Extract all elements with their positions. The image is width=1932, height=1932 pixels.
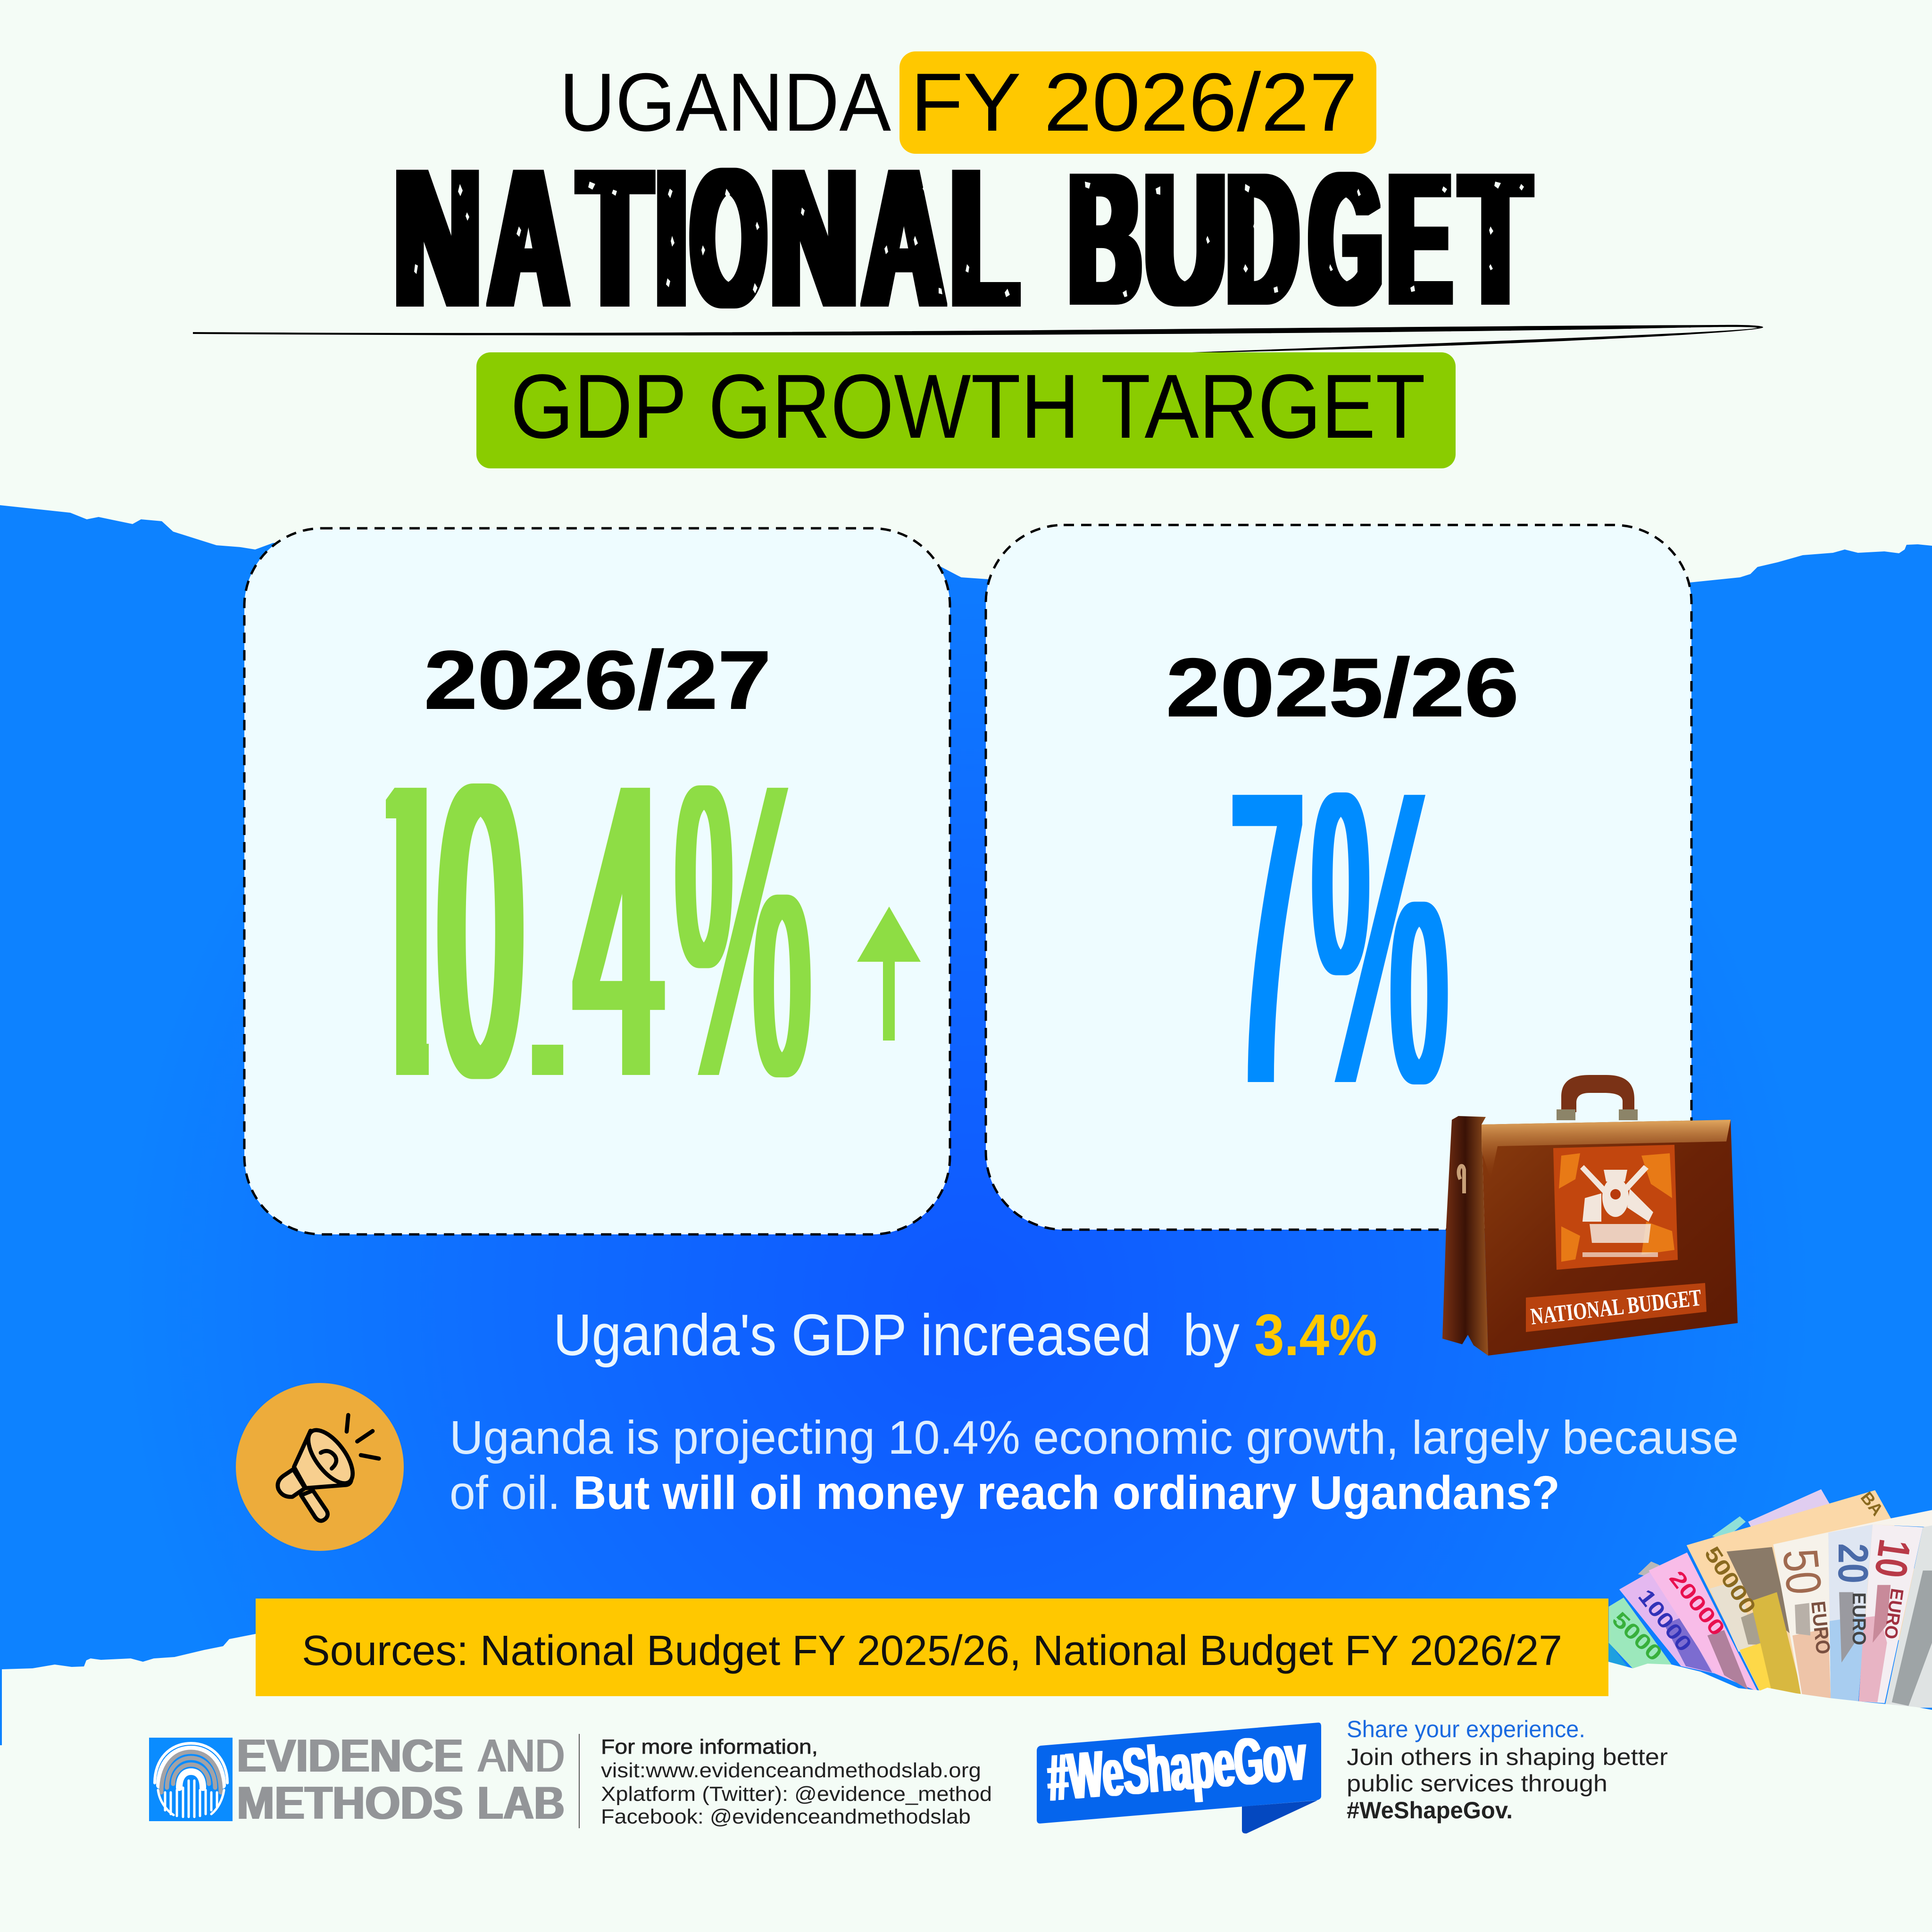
call to action text: public services through: [1347, 1770, 1607, 1797]
icon: up arrow: [857, 907, 921, 1041]
heading: National Budget: T: [1461, 135, 1530, 343]
illustration: fan of banknotes: 20000: [1665, 1566, 1730, 1640]
banner body: [1037, 1723, 1321, 1824]
fingerprint mark: [155, 1743, 227, 1817]
wordmark: EVIDENCE: [237, 1730, 463, 1782]
heading: National Budget: U: [1145, 135, 1225, 343]
growth value 10.4%: .: [524, 819, 571, 1135]
takeaway paragraph: of oil.: [450, 1466, 560, 1519]
coat of arms: [1580, 1165, 1658, 1257]
heading: National Budget: A: [490, 129, 567, 347]
wordmark: LAB: [477, 1777, 565, 1829]
growth value 10.4%: 0: [439, 697, 522, 1164]
panel: 2025/26: [986, 525, 1691, 1230]
growth value 10.4%: [386, 783, 811, 1079]
emblem plate: [1553, 1145, 1678, 1270]
hashtag banner: #WeShapeGov: [1037, 1719, 1321, 1833]
heading: National Budget: L: [951, 129, 1018, 347]
contact information: Xplatform (Twitter): @evidence_method: [601, 1782, 992, 1806]
sources bar: [256, 1599, 1608, 1696]
title line: Uganda FY 2026/27: [559, 51, 1376, 154]
side gusset: [1442, 1116, 1488, 1356]
blue torn-paper band: [0, 505, 1932, 1745]
subtitle pill: GDP growth target: GDP GROWTH TARGET: [510, 355, 1425, 457]
contact information: Facebook: @evidenceandmethodslab: [601, 1805, 971, 1828]
call to action text: [1347, 1716, 1668, 1824]
contact information: For more information,: [601, 1735, 818, 1758]
call to action text: Share your experience.: [1347, 1716, 1585, 1742]
illustration: fan of banknotes: EURO: [1849, 1592, 1869, 1645]
bold question: But will oil money reach ordinary Ugandans?: [573, 1466, 1560, 1519]
growth value 10.4%: 1: [348, 698, 464, 1164]
panel: 2026/27: [244, 528, 950, 1234]
highlighted figure: 3.4%: [1254, 1303, 1377, 1368]
heading: National Budget: [394, 129, 1530, 347]
note denominations: 5000: [1607, 1607, 1667, 1666]
logo: Evidence and Methods Lab: [149, 1730, 565, 1829]
heading: National Budget: N: [770, 129, 858, 347]
label plate: [1526, 1283, 1707, 1332]
growth value 10.4%: %: [675, 698, 811, 1164]
illustration: national budget briefcase: [1442, 1075, 1738, 1356]
illustration: fan of banknotes: 50: [1772, 1546, 1832, 1597]
comparison statement: by: [1183, 1303, 1240, 1368]
handle: [1561, 1075, 1634, 1112]
icon: megaphone: [236, 1383, 404, 1551]
illustration: fan of banknotes: 10000: [1633, 1584, 1697, 1656]
handle clips: [1557, 1109, 1638, 1120]
heading: National Budget: G: [1310, 134, 1382, 343]
wordmark: METHODS: [237, 1777, 463, 1829]
side strap ring: [1458, 1166, 1464, 1193]
fiscal year label: FY 2026/27: [910, 57, 1357, 149]
call to action text: Join others in shaping better: [1347, 1744, 1668, 1770]
heading: National Budget: B: [1069, 134, 1140, 343]
front face: [1482, 1120, 1738, 1356]
growth value 7%: [1234, 705, 1449, 1171]
illustration: fan of banknotes: BA: [1857, 1488, 1887, 1519]
year label: 2026/27: [424, 634, 771, 726]
illustration: fan of banknotes: [1607, 1488, 1932, 1707]
heading: National Budget: T: [579, 130, 650, 347]
comparison statement: Uganda's GDP increased: [553, 1303, 1151, 1368]
wordmark: [237, 1730, 565, 1829]
heading: National Budget: E: [1389, 135, 1450, 343]
heading: National Budget: O: [691, 129, 766, 347]
FY pill: [899, 51, 1376, 154]
card: [986, 525, 1691, 1230]
emblem texture: [1559, 1153, 1674, 1262]
takeaway paragraph: Uganda is projecting 10.4% economic growth, largely because: [450, 1411, 1739, 1464]
growth value 10.4%: 4: [576, 698, 662, 1164]
growth value 7%: 7: [1234, 705, 1301, 1171]
shield centre: [1610, 1189, 1621, 1199]
illustration: fan of banknotes: 50000: [1700, 1542, 1761, 1618]
illustration: fan of banknotes: 10: [1865, 1536, 1920, 1581]
banner hashtag: #WeShapeGov: [1044, 1719, 1309, 1815]
illustration: fan of banknotes: EURO: [1807, 1600, 1835, 1655]
call to action text: #WeShapeGov.: [1347, 1797, 1513, 1824]
heading: National Budget: D: [1227, 135, 1298, 343]
label text: NATIONAL BUDGET: [1529, 1284, 1703, 1330]
growth value 7%: %: [1311, 705, 1449, 1171]
year label: 2025/26: [1166, 642, 1519, 734]
wordmark: AND: [478, 1730, 565, 1782]
takeaway paragraph: [450, 1411, 1739, 1519]
banner fold: [1242, 1800, 1317, 1833]
Uganda label: UGANDA: [559, 57, 891, 149]
illustration: fan of banknotes: 20: [1829, 1543, 1876, 1583]
top highlight: [1482, 1120, 1731, 1179]
sources bar: Sources: National Budget FY 2025/26, National Budget FY 2026/27: [302, 1627, 1562, 1674]
lower torn-paper footer background: [2, 1634, 1932, 1932]
illustration: fan of banknotes: EURO: [1880, 1587, 1907, 1641]
contact information: visit:www.evidenceandmethodslab.org: [601, 1759, 981, 1782]
swoosh underline: [193, 325, 1763, 354]
contact information: [601, 1735, 992, 1828]
logo square: [149, 1738, 233, 1821]
card: [244, 528, 950, 1234]
heading: National Budget: A: [864, 129, 944, 347]
heading: National Budget: N: [394, 129, 481, 347]
logo divider: [579, 1734, 580, 1828]
heading: National Budget: I: [656, 129, 687, 347]
